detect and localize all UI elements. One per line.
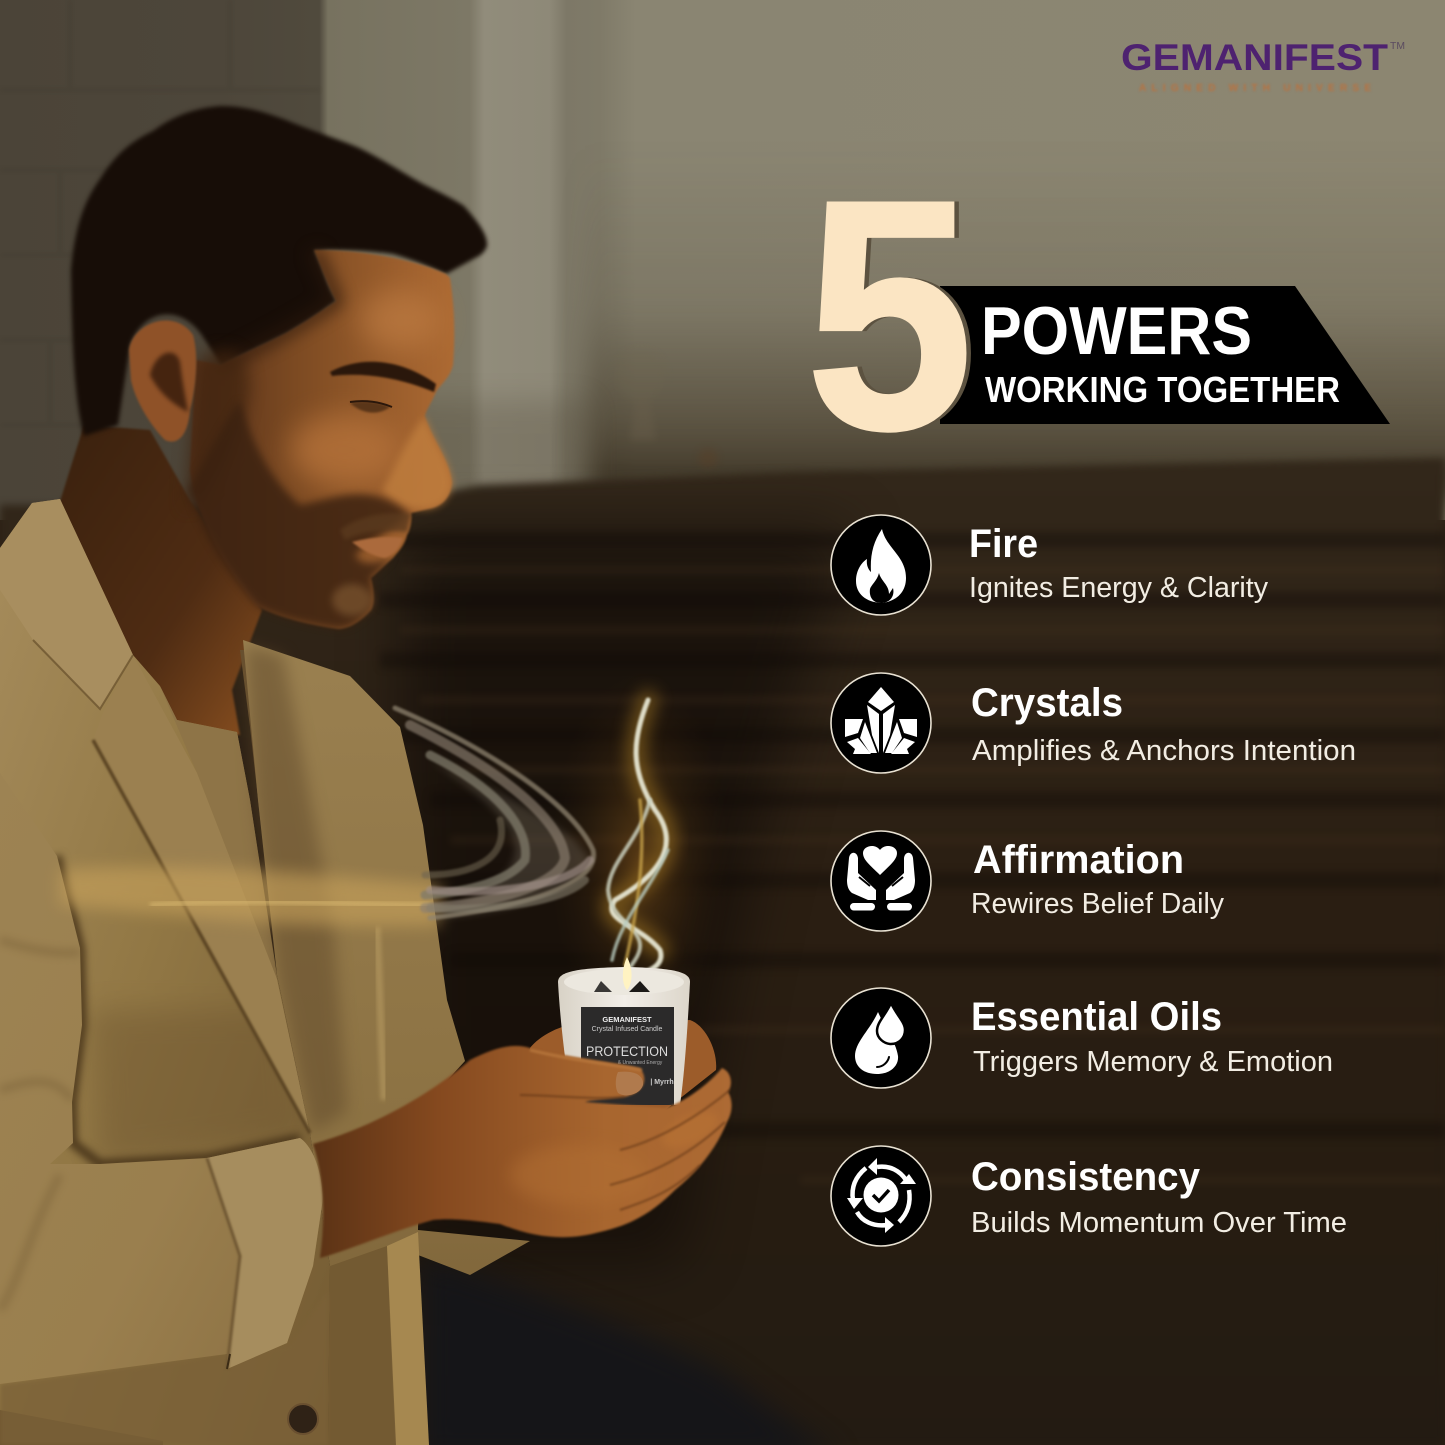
cuff: [207, 1138, 323, 1369]
hand holding candle: [313, 1046, 732, 1258]
t-shirt: [160, 686, 277, 979]
power 3: affirmation: [831, 831, 1224, 931]
icon: flame: [831, 515, 931, 615]
affirmation title: Affirmation: [973, 838, 1184, 882]
lapel: [93, 655, 310, 1133]
cabinet: [0, 458, 1445, 1445]
hairline shadow: [221, 250, 336, 365]
crystals description: Amplifies & Anchors Intention: [972, 735, 1356, 767]
logo: TM: [1390, 41, 1405, 52]
golden swirl band: [60, 867, 440, 926]
shirt placket: [240, 650, 290, 969]
beard: [188, 400, 408, 629]
candle glass: [558, 967, 690, 1105]
sleeve shadow: [57, 856, 300, 1164]
crystals: [594, 981, 612, 992]
affirmation description: Rewires Belief Daily: [971, 888, 1224, 920]
icon: crystals: [831, 673, 931, 773]
left sleeve: [0, 773, 322, 1384]
lower panel: [328, 1246, 395, 1445]
label: [581, 1007, 674, 1105]
swirl of smoke around the man: [395, 708, 594, 918]
cabinet slats: [380, 540, 1445, 1130]
candle: [558, 957, 690, 1105]
candle: Crystal Infused Candle: [592, 1026, 663, 1033]
candle: & Unwanted Energy: [618, 1060, 663, 1066]
power 2: crystals: [831, 673, 1356, 773]
working together: WORKING TOGETHER: [985, 369, 1340, 410]
icon: oil drops: [831, 988, 931, 1088]
power 4: essential oils: [831, 988, 1333, 1088]
essential oils title: Essential Oils: [971, 995, 1222, 1039]
icon: heart in hands: [831, 831, 931, 931]
face: [190, 250, 454, 629]
neck: [57, 425, 262, 735]
candle: PROTECTION: [586, 1043, 668, 1059]
fire description: Ignites Energy & Clarity: [969, 572, 1268, 604]
sleeve folds: [0, 940, 80, 1310]
button: [288, 1404, 318, 1434]
logo: [1121, 37, 1405, 94]
hand behind candle: [530, 1020, 716, 1130]
jacket body: [0, 499, 330, 1445]
logo: ALIGNED WITH UNIVERSE: [1139, 83, 1371, 94]
nose light: [382, 416, 452, 509]
eye: [350, 402, 390, 413]
candle: GEMANIFEST: [602, 1015, 652, 1024]
logo: GEMANIFEST: [1121, 37, 1388, 78]
fold shading right front: [245, 645, 347, 1133]
light front strip: [387, 1232, 429, 1445]
power 1: fire: [831, 515, 1268, 615]
eyebrow: [330, 362, 436, 392]
man: [0, 106, 716, 1445]
ear: [129, 320, 196, 442]
thumb nail: [616, 1072, 643, 1095]
jacket right front: [243, 640, 530, 1445]
mustache: [340, 513, 411, 540]
forehead light: [360, 290, 440, 350]
palm highlight: [510, 1145, 650, 1205]
warm candle glow: [550, 670, 730, 1050]
hair: [71, 106, 487, 436]
candle smoke: [608, 700, 668, 975]
collar: [0, 499, 133, 709]
icon: cycle with check: [831, 1146, 931, 1246]
cheek light: [290, 414, 400, 486]
blurred vase on ledge: [614, 349, 718, 468]
floor shadow: [420, 1255, 840, 1445]
seam highlight: [377, 927, 384, 1100]
finger creases: [520, 1090, 730, 1210]
jacket hem shade: [0, 1290, 328, 1445]
banner: [940, 286, 1390, 424]
essential oils description: Triggers Memory & Emotion: [973, 1046, 1333, 1078]
brick wall hint: [0, 0, 320, 425]
consistency description: Builds Momentum Over Time: [971, 1207, 1347, 1239]
powers: POWERS: [981, 293, 1252, 369]
lips: [352, 537, 403, 558]
consistency title: Consistency: [971, 1155, 1201, 1199]
back jaw shadow: [185, 350, 250, 510]
fire title: Fire: [969, 522, 1038, 566]
crystals title: Crystals: [971, 681, 1123, 725]
big 5: 5: [806, 133, 974, 498]
heading: 5 powers: [806, 133, 1390, 498]
chin stubble light: [332, 584, 372, 616]
pocket shade: [0, 1410, 163, 1445]
jacket body lower shade: [90, 1010, 300, 1165]
flame: [623, 957, 632, 990]
big 5 shadow: 5: [810, 133, 978, 498]
candle: | Myrrh: [650, 1079, 674, 1086]
power 5: consistency: [831, 1146, 1347, 1246]
